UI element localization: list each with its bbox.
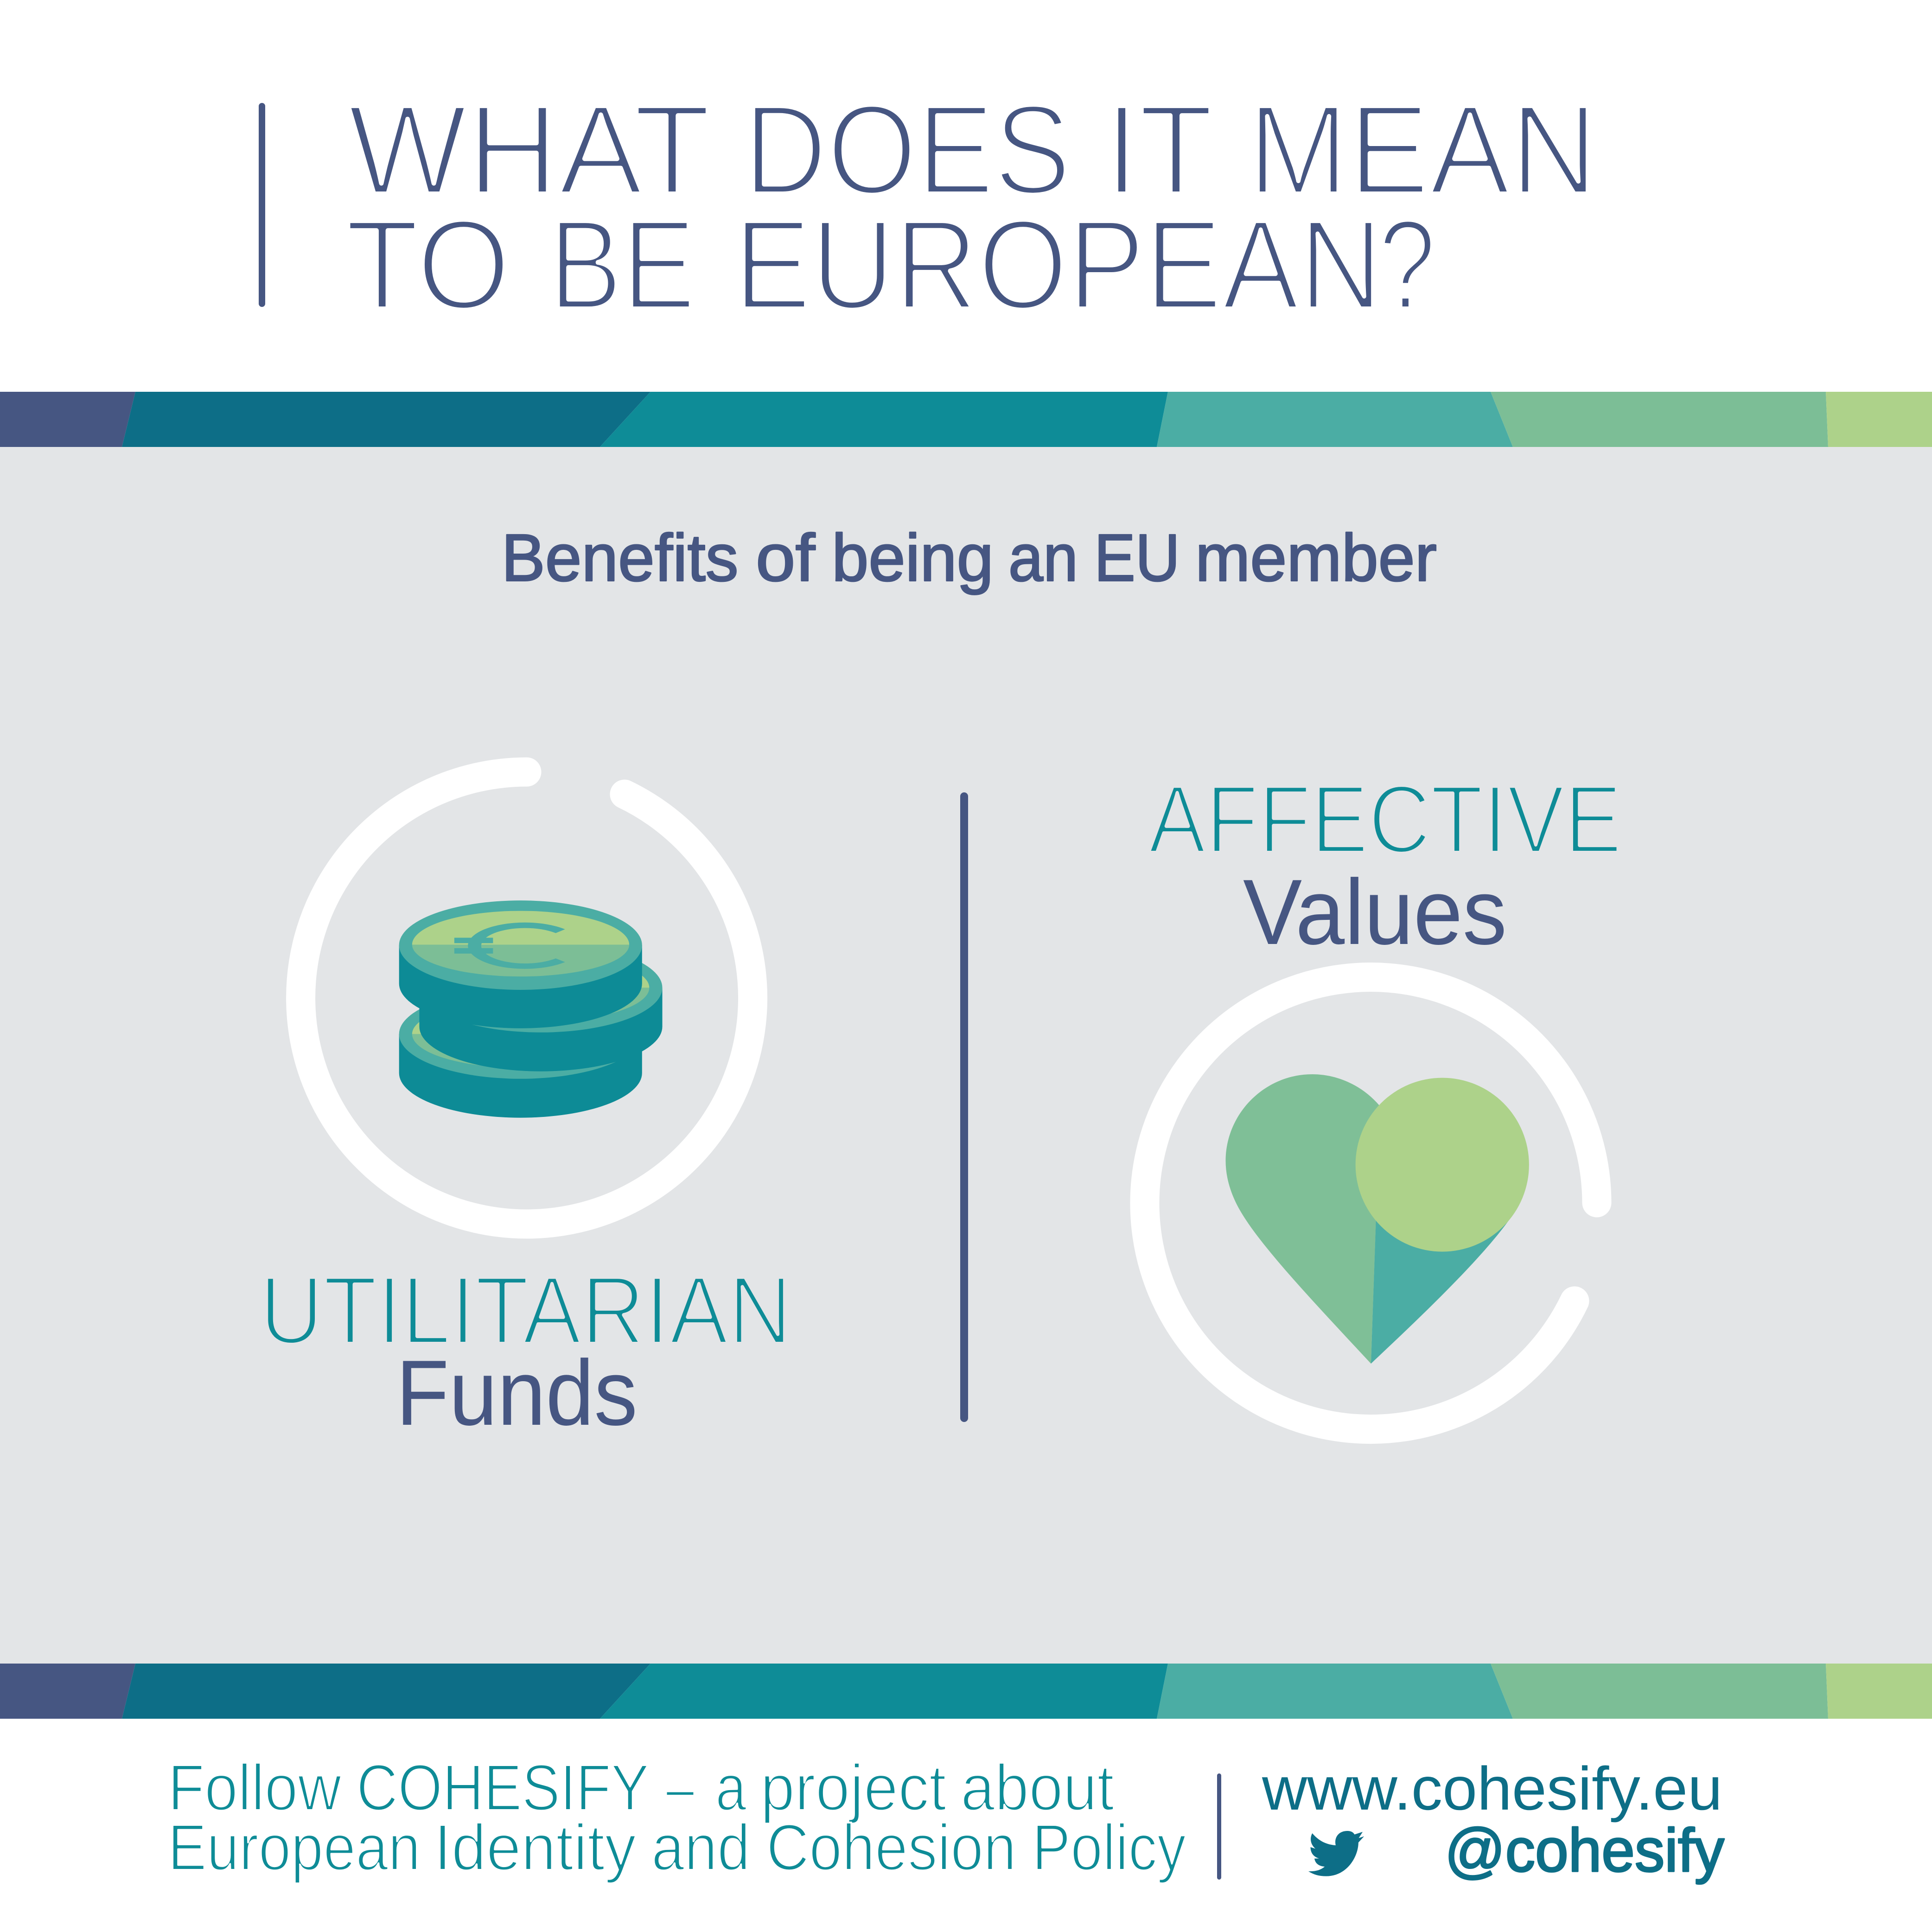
- title: EUROPEAN: [734, 193, 1383, 336]
- bottom colour band: [0, 1664, 1932, 1719]
- label: values: Values: [1243, 861, 1507, 964]
- footer text: project: Policy: [1032, 1811, 1186, 1884]
- heading: benefits: [502, 520, 1437, 595]
- title: IT: [1105, 78, 1213, 221]
- panel: grey content background: [0, 447, 1932, 1664]
- central vertical divider: [960, 792, 968, 1422]
- icon: twitter bird: [1308, 1831, 1364, 1876]
- footer text: project: Follow: [168, 1751, 342, 1824]
- footer text: project: European: [168, 1811, 421, 1884]
- bottom coin: [399, 989, 642, 1118]
- heading: benefits: an: [1008, 520, 1078, 595]
- title: ?: [1378, 193, 1436, 336]
- footer text: project: Identity: [434, 1811, 636, 1884]
- footer divider: [1217, 1773, 1221, 1880]
- title: MEAN: [1248, 78, 1598, 221]
- title: [345, 78, 1598, 336]
- title: BE: [549, 193, 695, 336]
- twitter handle: @cohesify: [1445, 1816, 1724, 1884]
- heading: benefits: Benefits: [502, 520, 738, 595]
- heading: benefits: of: [756, 520, 816, 595]
- footer text: project: Cohesion: [766, 1811, 1016, 1884]
- footer text: project: about: [961, 1751, 1114, 1824]
- footer text: project: –: [666, 1751, 694, 1824]
- heading: benefits: EU: [1094, 520, 1180, 595]
- title: DOES: [744, 78, 1071, 221]
- label: affective: AFFECTIVE: [1148, 765, 1622, 874]
- label: funds: Funds: [396, 1341, 638, 1445]
- website: www.cohesify.eu: [1262, 1754, 1722, 1823]
- icon: stack of euro coins: [399, 900, 663, 1118]
- footer text: project: a: [715, 1751, 746, 1824]
- top colour band: [0, 392, 1932, 447]
- footer text: project: and: [651, 1811, 750, 1884]
- footer text: project: COHESIFY: [357, 1751, 649, 1824]
- label: utilitarian: UTILITARIAN: [260, 1256, 792, 1365]
- title divider bar: [259, 103, 265, 307]
- footer text: project: project: [760, 1751, 946, 1824]
- title: WHAT: [348, 78, 711, 221]
- icon: heart: [1226, 1074, 1529, 1364]
- title: TO: [345, 193, 510, 336]
- footer text: project: [168, 1751, 1186, 1884]
- middle coin: [419, 943, 663, 1071]
- heading: benefits: being: [832, 520, 994, 595]
- ring: utilitarian: [301, 772, 753, 1224]
- ring: affective: [1145, 977, 1597, 1429]
- heading: benefits: member: [1195, 520, 1437, 595]
- top coin: [399, 900, 642, 1028]
